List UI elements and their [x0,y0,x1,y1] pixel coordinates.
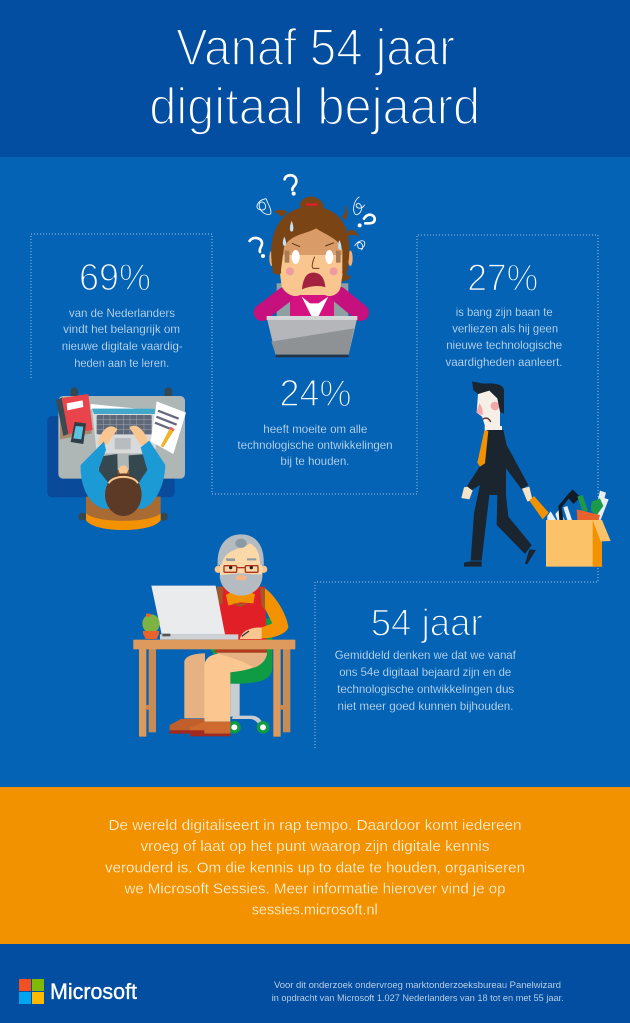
header band with title [0,0,630,157]
Microsoft logo: Microsoft [50,979,137,1004]
sleeves and jacket [290,295,334,317]
stat: 69%: van de Nederlanders [69,307,175,320]
stat: 69%: nieuwe digitale vaardig- [62,340,183,353]
illustration: older man at desk with laptop [133,534,295,737]
footer band [0,944,630,1023]
stat: 24%: bij te houden. [280,455,350,468]
stat: 24%: heeft moeite om alle [263,423,367,436]
cardboard box contents [529,489,611,567]
stat: 54 jaar: niet meer goed kunnen bijhouden. [338,700,514,713]
stat: 69%: 69% [79,257,151,299]
stat: 27%: nieuwe technologische [446,339,562,352]
illustration: stressed woman at laptop [250,175,375,357]
icon: question marks and scribbles [250,175,375,258]
header band with title: Vanaf 54 jaar [176,19,455,77]
stat: 54 jaar: technologische ontwikkelingen dus [337,683,514,696]
stat: 54 jaar: 54 jaar [371,602,483,644]
stat: 27%: verliezen als hij geen [452,322,558,336]
header band with title: digitaal bejaard [149,78,480,136]
orange call-to-action band: sessies.microsoft.nl [252,902,378,918]
footnote [272,979,564,1003]
illustration: man leaving with a box [461,381,611,567]
footnote: Voor dit onderzoek ondervroeg marktonderzoeksbureau Panelwizard [274,979,561,990]
torso [217,587,267,640]
laptop [151,586,225,634]
stat: 54 jaar [335,602,517,713]
orange call-to-action band: vroeg of laat op het punt waarop zijn digitale kennis [140,838,490,855]
stat: 54 jaar: Gemiddeld denken we dat we vanaf [335,649,517,662]
cactus [142,614,160,633]
stat: 24%: technologische ontwikkelingen [238,439,392,452]
stat: 27%: vaardigheden aanleert. [446,356,562,369]
illustration: person at desk from above [47,387,186,530]
face [281,232,342,297]
stat: 27%: 27% [467,258,538,300]
hair back [271,207,349,282]
orange call-to-action band [0,787,630,944]
orange call-to-action band: verouderd is. Om die kennis up to date te houden, organiseren [105,860,525,876]
stat: 69%: vindt het belangrijk om [63,323,180,336]
stat: 69% [62,257,183,370]
stat: 27%: is bang zijn baan te [456,306,553,319]
laptop [267,317,357,355]
head [215,566,222,573]
stat: 24%: 24% [280,373,352,415]
stat: 54 jaar: ons 54e digitaal bejaard zijn en de [339,666,511,679]
chair [230,684,240,717]
stat: 27% [446,258,562,369]
orange call-to-action band: we Microsoft Sessies. Meer informatie hierover vind je op [124,880,506,898]
stat: 69%: heden aan te leren. [74,357,169,370]
footnote: in opdracht van Microsoft 1.027 Nederlanders van 18 tot en met 55 jaar. [272,992,564,1003]
body [467,430,532,561]
stat: 24% [238,373,392,468]
orange call-to-action band: De wereld digitaliseert in rap tempo. Daardoor komt iedereen [108,817,522,834]
desk and legs [184,653,205,718]
